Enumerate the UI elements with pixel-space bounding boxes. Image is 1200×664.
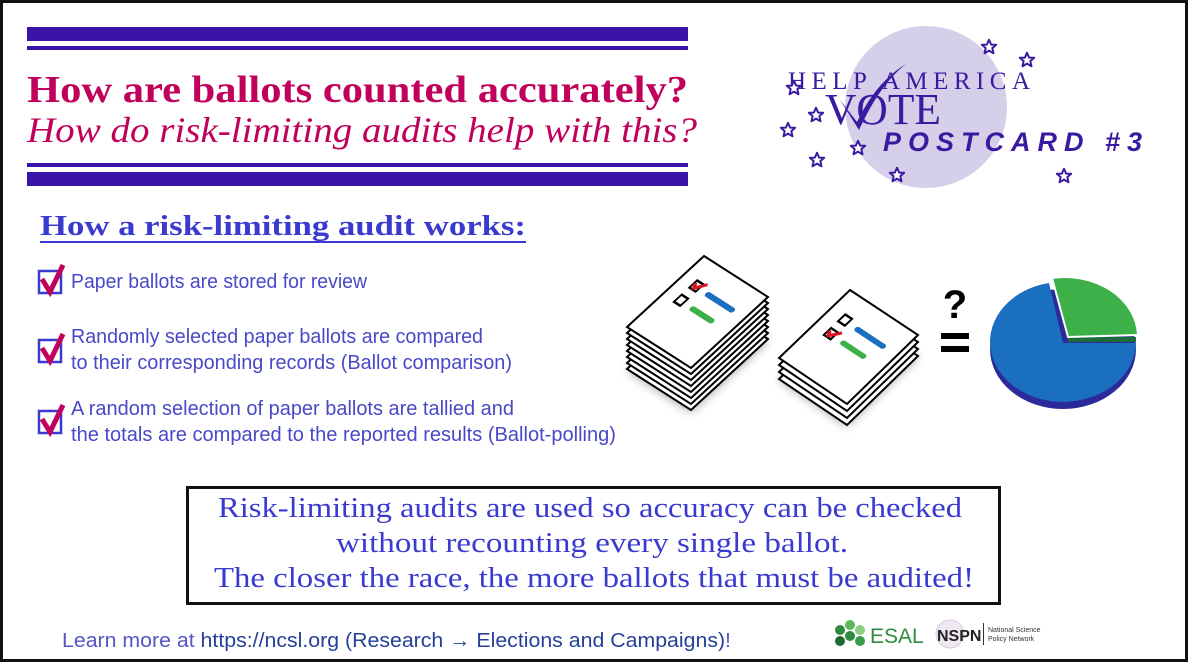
callout box: Risk-limiting audits are used so accuracy can be checked	[218, 493, 962, 524]
illustration: small ballot stack	[779, 290, 918, 426]
logo: ESAL: ESAL	[870, 625, 924, 648]
subtitle: How do risk-limiting audits help with this?	[26, 110, 697, 150]
item 2: to their corresponding records (Ballot comparison)	[71, 352, 512, 374]
logo: NSPN: NSPN	[937, 628, 981, 645]
logo: Help America Vote Postcard #3: HELP AMERICA	[788, 68, 1030, 95]
illustration: large ballot stack	[627, 256, 768, 412]
logo: ESAL	[835, 620, 924, 648]
item 2	[39, 326, 512, 374]
header bars top	[27, 27, 688, 50]
item 2: Randomly selected paper ballots are compared	[71, 326, 483, 348]
logo: NSPN: National Science	[988, 627, 1041, 634]
logo: NSPN	[936, 620, 1041, 648]
title: How are ballots counted accurately?	[27, 69, 688, 111]
pie chart	[990, 277, 1138, 409]
item 3: A random selection of paper ballots are tallied and	[71, 398, 514, 420]
question mark and equals: ?	[943, 283, 967, 327]
callout box	[188, 488, 1000, 604]
footer text: Learn more at https://ncsl.org (Research → Elections and Campaigns) !	[62, 630, 731, 652]
logo: Help America Vote Postcard #3: POSTCARD #3	[883, 127, 1142, 157]
logo: Help America Vote Postcard #3	[781, 26, 1142, 188]
logo: Help America Vote Postcard #3: VOTE	[825, 85, 941, 134]
question mark and equals	[941, 283, 969, 352]
item 1	[39, 265, 368, 293]
checklist	[39, 265, 616, 446]
header bars bottom	[27, 163, 688, 186]
callout box: without recounting every single ballot.	[336, 528, 848, 559]
logo: NSPN: Policy Network	[988, 636, 1035, 643]
item 1: Paper ballots are stored for review	[71, 271, 368, 293]
item 3: the totals are compared to the reported results (Ballot-polling)	[71, 424, 616, 446]
section heading: How a risk-limiting audit works:	[40, 210, 526, 242]
item 3	[39, 398, 616, 446]
callout box: The closer the race, the more ballots that must be audited!	[214, 563, 974, 594]
